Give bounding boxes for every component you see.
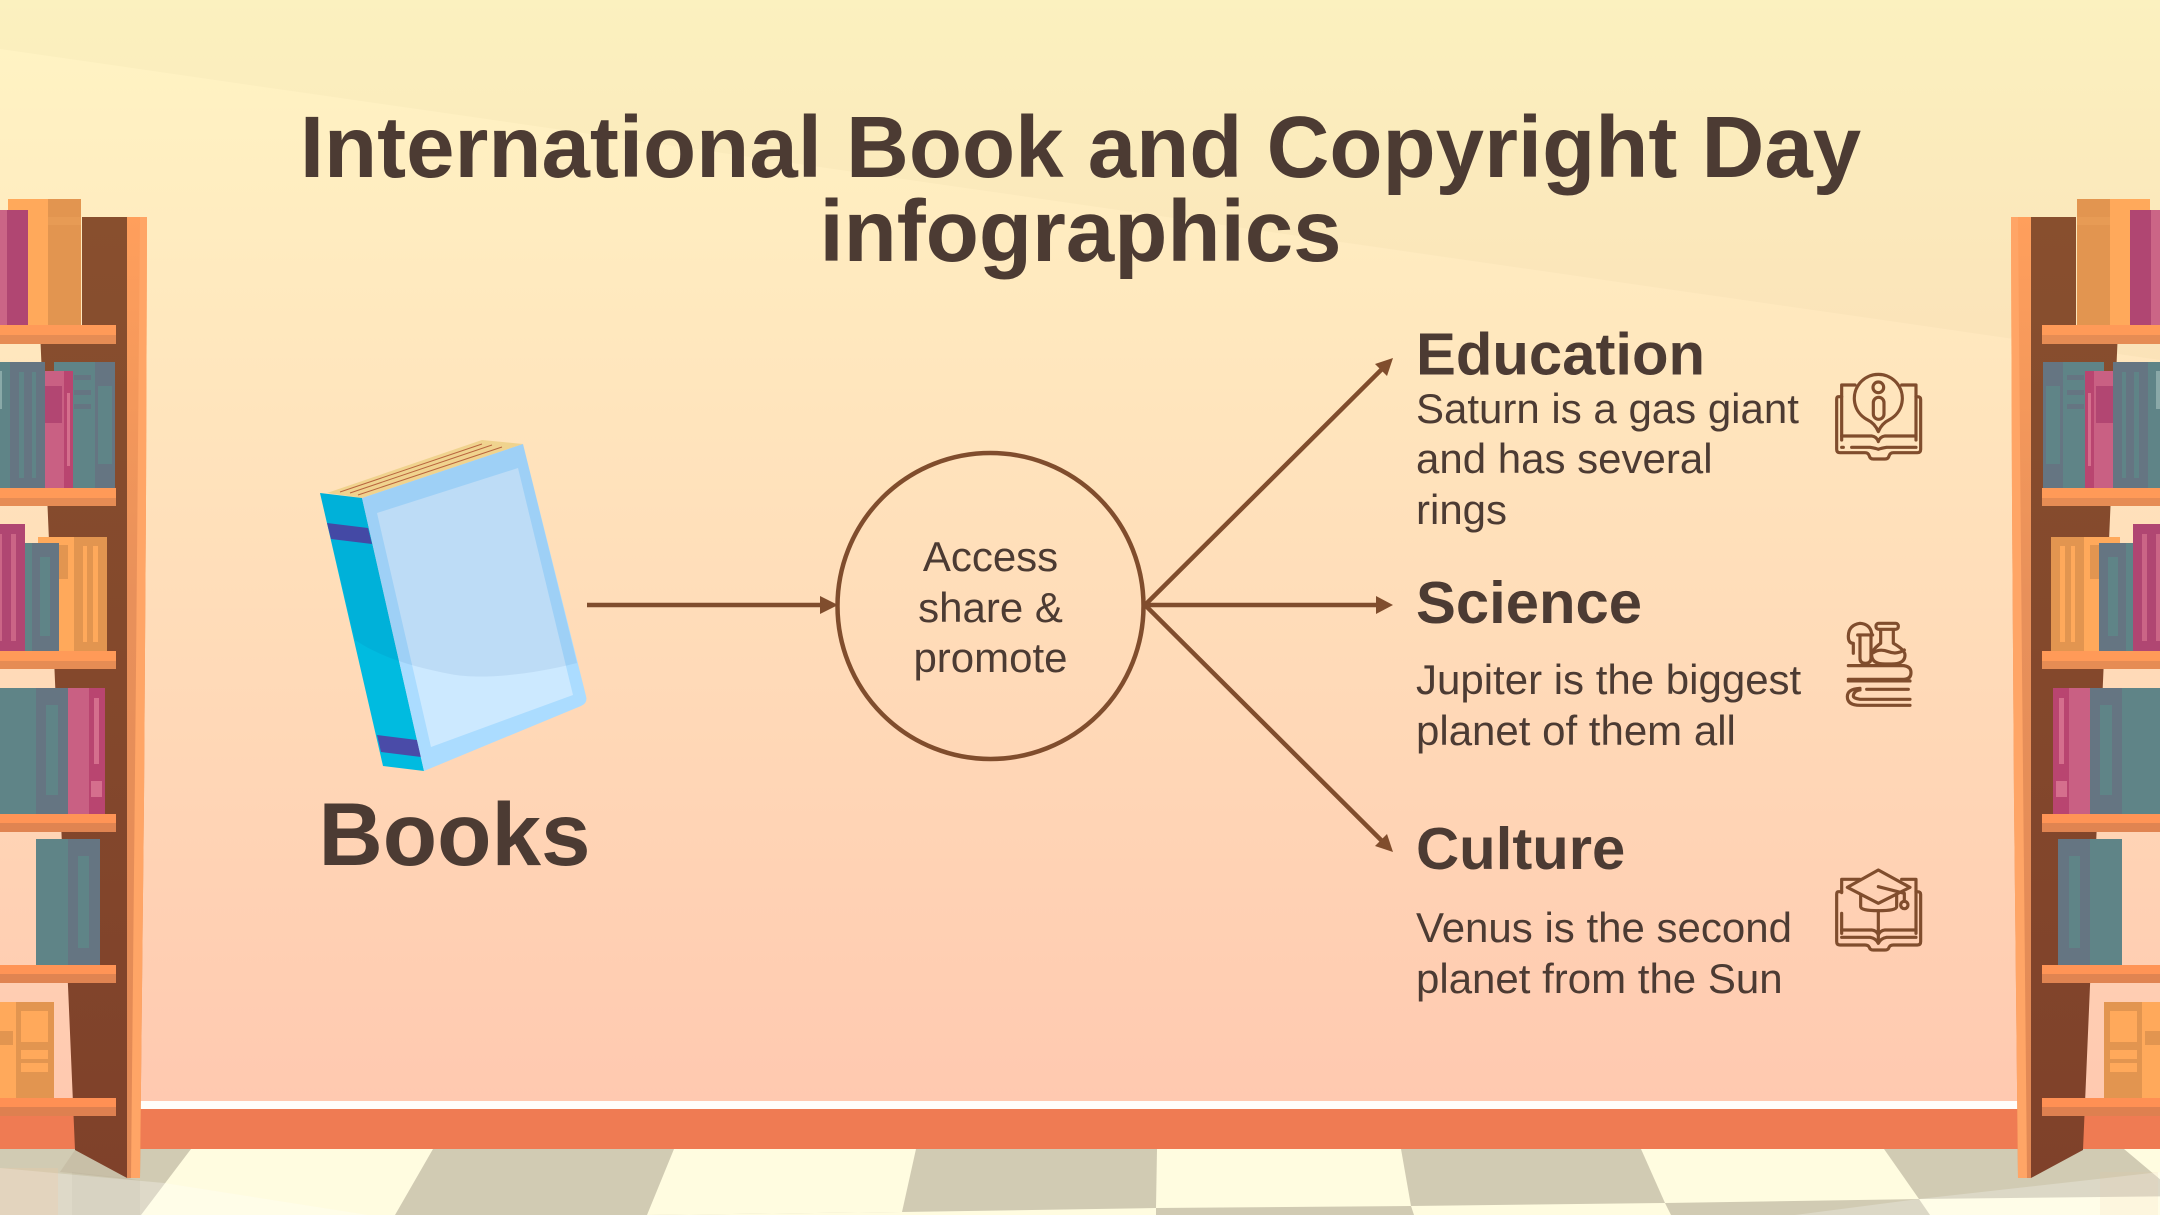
arrow: books to circle: [587, 596, 838, 614]
education block: and has several: [1416, 435, 1713, 482]
circle: access share and promote: [838, 453, 1144, 759]
book cover: [362, 444, 586, 771]
books label: Books: [318, 784, 590, 884]
diagonal light band: [0, 0, 2160, 360]
science block: [1416, 569, 1802, 754]
arrow: to education: [1145, 358, 1393, 605]
culture block: planet from the Sun: [1416, 955, 1783, 1002]
checkered floor: [0, 1149, 2160, 1215]
shelf boards: [0, 325, 116, 1116]
icon: book with info bubble: [1837, 374, 1921, 459]
circle: access share and promote: share &: [918, 584, 1063, 631]
arrow: to culture: [1145, 605, 1393, 852]
education block: rings: [1416, 486, 1507, 533]
education block: Saturn is a gas giant: [1416, 385, 1799, 432]
shelf side panel: [127, 217, 147, 1178]
title: [300, 99, 1861, 280]
education block: Education: [1416, 320, 1705, 388]
science block: planet of them all: [1416, 707, 1736, 754]
education block: [1416, 320, 1799, 533]
bookshelf right: [2011, 199, 2160, 1178]
culture block: Venus is the second: [1416, 904, 1792, 951]
books row 3: [0, 524, 107, 651]
books row 5: [36, 839, 100, 965]
books row 2: [0, 362, 115, 488]
title: International Book and Copyright Day: [300, 99, 1861, 196]
books row 4: [0, 688, 105, 814]
culture block: [1416, 815, 1792, 1002]
science block: Science: [1416, 569, 1642, 636]
cover shading: [320, 444, 577, 677]
book spine: [320, 493, 424, 771]
book pages: [327, 440, 523, 498]
title: infographics: [819, 183, 1342, 280]
shelf back panel: [40, 217, 127, 1178]
bookshelf left: [0, 199, 147, 1178]
books row 6: [0, 1002, 54, 1098]
icon: flask and books: [1847, 623, 1911, 705]
spine bands: [327, 523, 421, 757]
circle: access share and promote: promote: [913, 634, 1068, 681]
icon: book illustration: [320, 440, 586, 771]
cover inset: [377, 468, 573, 747]
circle: access share and promote: Access: [923, 533, 1058, 580]
skirting board: [0, 1101, 2160, 1150]
culture block: Culture: [1416, 815, 1625, 882]
science block: Jupiter is the biggest: [1416, 656, 1802, 703]
books row 1: [0, 199, 81, 325]
arrow: to science: [1145, 596, 1393, 614]
icon: book with graduation cap: [1837, 870, 1921, 950]
